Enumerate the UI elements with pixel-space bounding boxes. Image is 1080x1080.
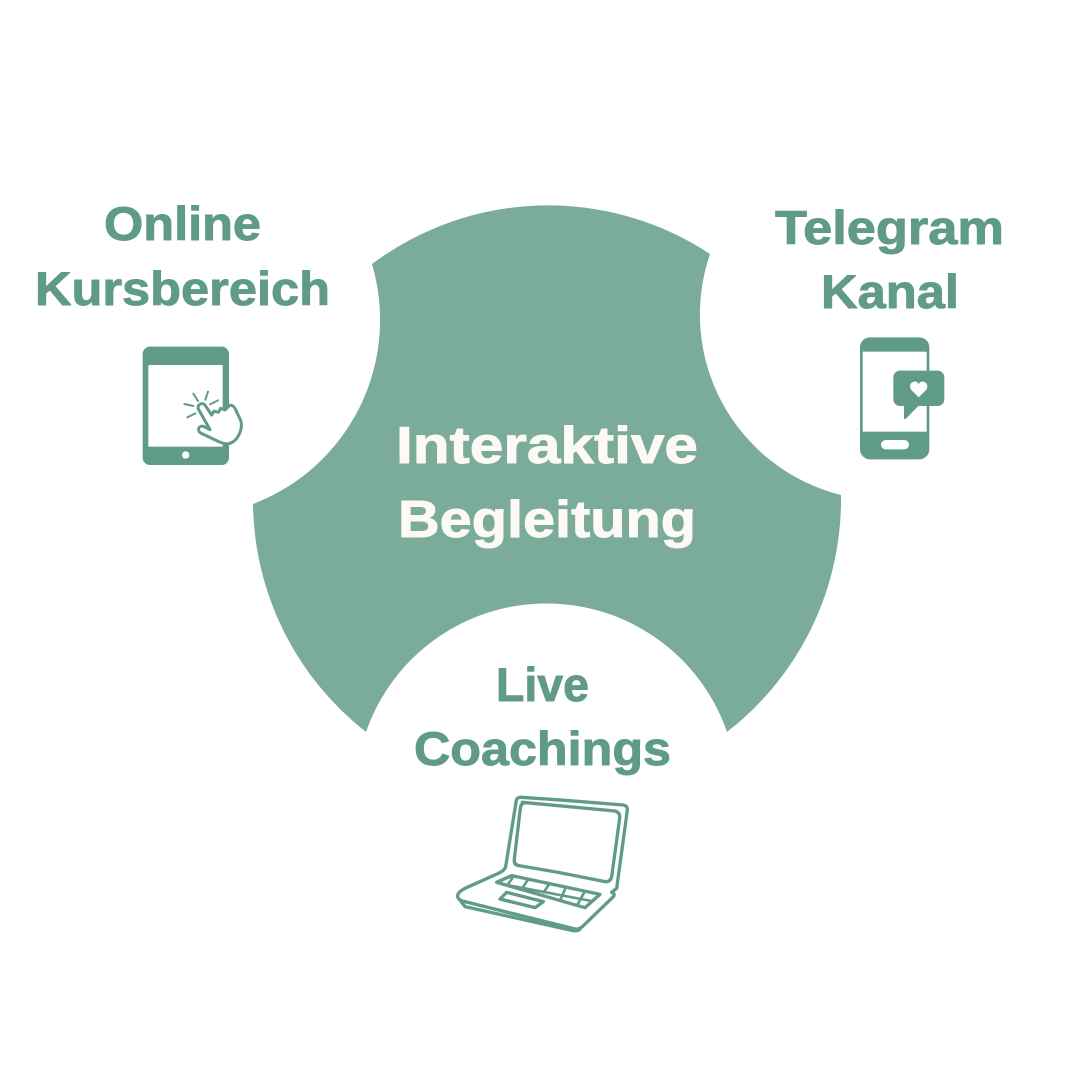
central three-lobed shape bbox=[253, 205, 841, 732]
heading: Live Coachings: Coachings bbox=[414, 722, 671, 775]
heading: Online Kursbereich: Kursbereich bbox=[35, 262, 330, 315]
heading: Telegram Kanal: Telegram bbox=[775, 201, 1004, 254]
heading: Telegram Kanal: Kanal bbox=[821, 265, 959, 318]
heading: Telegram Kanal bbox=[775, 201, 1004, 318]
heading: Live Coachings bbox=[414, 658, 671, 775]
heading: Online Kursbereich bbox=[35, 197, 330, 315]
center title: Interaktive bbox=[396, 417, 698, 475]
icon: hand-drawn laptop bbox=[458, 797, 627, 931]
icon: phone with heart message bbox=[860, 337, 944, 459]
center title bbox=[396, 417, 698, 549]
heading: Live Coachings: Live bbox=[496, 658, 589, 711]
center title: Begleitung bbox=[398, 491, 696, 549]
icon: tablet with tapping hand bbox=[143, 347, 241, 465]
heading: Online Kursbereich: Online bbox=[104, 197, 261, 250]
